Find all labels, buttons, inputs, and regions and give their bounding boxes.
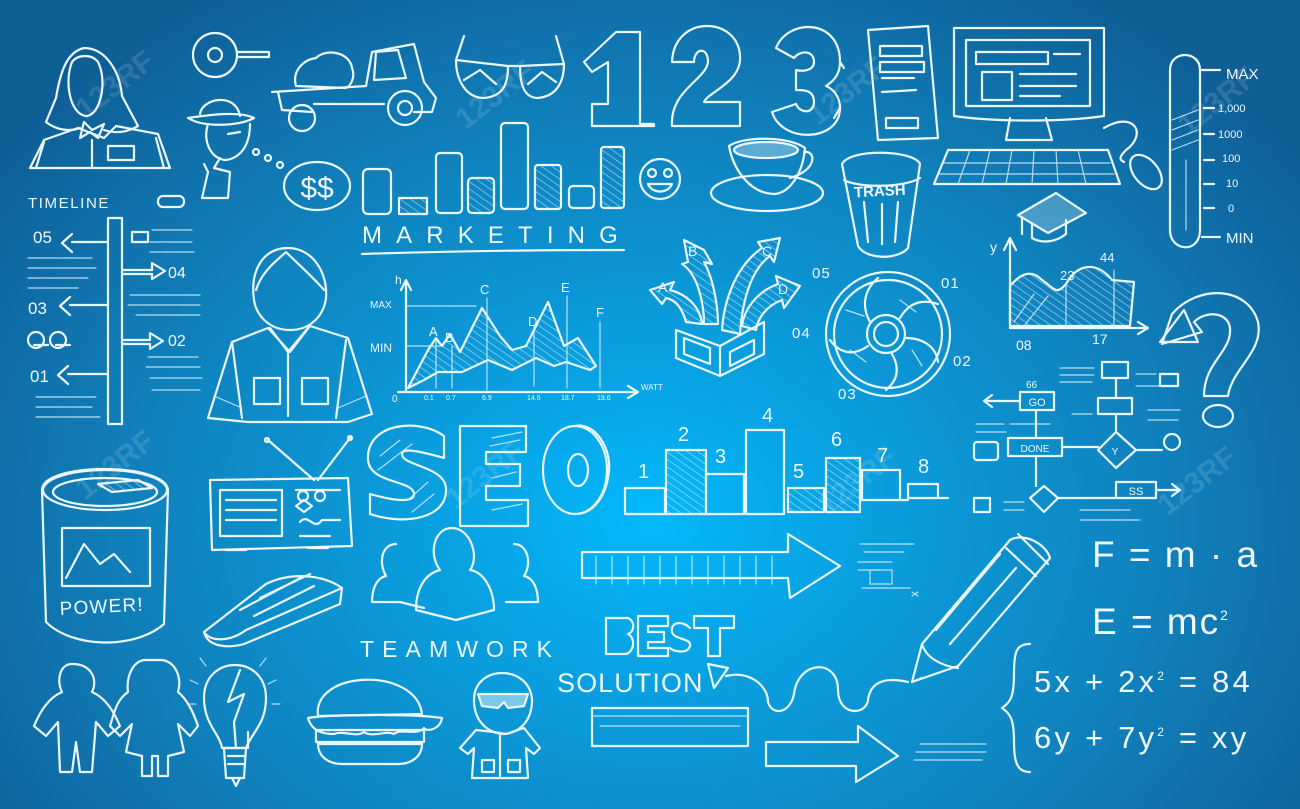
icon: thermometer scale: 10: [1226, 178, 1238, 190]
icon: woman portrait: [30, 48, 170, 168]
line chart: max min: h: [395, 273, 402, 287]
text block: sketch note: [858, 544, 918, 596]
line chart: max min: 14.6: [527, 395, 541, 402]
panel: flowchart: GO: [1028, 397, 1046, 409]
icon: flat bar: [592, 708, 748, 746]
line chart: max min: F: [596, 305, 604, 320]
icon: box with arrows: B: [688, 243, 697, 259]
icon: team of people: [372, 528, 538, 620]
bar chart: numbered podium: 4: [762, 405, 773, 427]
icon: trash bin: [842, 153, 920, 257]
watermarks: 123RF: [70, 424, 161, 506]
bar chart: numbered podium: [625, 405, 948, 514]
heading: timeline: TIMELINE: [28, 195, 110, 212]
text block: note lines: [914, 744, 986, 760]
icon: graduation cap: [1018, 193, 1086, 241]
icon: camera-shutter pie: 02: [953, 353, 972, 370]
text: physics formulas: E = mc: [1092, 601, 1220, 642]
icon: box with arrows: [650, 238, 800, 376]
text: equations with brace: = 84: [1167, 664, 1253, 699]
icon: box with arrows: D: [778, 281, 788, 297]
icon: frying pan: [193, 33, 269, 77]
panel: flowchart: [974, 362, 1180, 520]
text: equations with brace: = xy: [1167, 720, 1249, 755]
icon: glasses: [456, 36, 564, 98]
line chart: max min: 18.7: [561, 395, 575, 402]
bar chart: numbered podium: 2: [678, 424, 689, 446]
area chart: y axis: [990, 238, 1148, 353]
bar chart: top sketch bars: [363, 123, 624, 214]
icon: thermometer scale: 0: [1228, 203, 1234, 215]
icon: smiley: [640, 159, 680, 199]
icon: camera-shutter pie: 04: [792, 325, 811, 342]
icon: trash bin: TRASH: [854, 182, 906, 201]
line chart: max min: 0: [392, 394, 398, 405]
icon: camera-shutter pie: 01: [941, 275, 960, 292]
panel: timeline diagram: 05: [33, 228, 52, 247]
icon: thermometer scale: 100: [1222, 153, 1240, 165]
watermarks: 123RF: [70, 44, 161, 126]
line chart: max min: C: [480, 282, 489, 297]
icon: big right arrow: [582, 534, 840, 598]
icon: thermometer scale: 1000: [1218, 129, 1242, 141]
icon: man and woman: [34, 660, 198, 776]
heading: timeline: [28, 195, 184, 212]
text: physics formulas: 2: [1220, 607, 1230, 623]
bar chart: numbered podium: 6: [831, 429, 842, 451]
icon: monitor and keyboard: [934, 28, 1168, 195]
icon: light bulb: [188, 658, 280, 786]
panel: timeline diagram: 01: [30, 367, 49, 386]
watermarks: 123RF: [1152, 441, 1243, 522]
icon: question mark: [1160, 293, 1259, 427]
line chart: max min: [370, 273, 663, 405]
panel: timeline diagram: [28, 218, 202, 424]
watermarks: 123RF: [1172, 61, 1263, 142]
panel: flowchart: SS: [1129, 486, 1143, 498]
bar chart: numbered podium: 3: [715, 446, 726, 468]
icon: businessman bust: [208, 248, 372, 422]
icon: box with arrows: A: [658, 279, 668, 295]
bar chart: numbered podium: 7: [877, 445, 888, 467]
icon: camera-shutter pie: 05: [812, 265, 831, 282]
line chart: max min: MIN: [370, 341, 392, 355]
line chart: max min: B: [445, 330, 454, 345]
line chart: max min: 0.1: [424, 395, 434, 402]
area chart: y axis: y: [990, 239, 997, 255]
icon: camera-shutter pie: 03: [838, 386, 857, 403]
icon: radio tv: [210, 436, 352, 550]
line chart: max min: A: [429, 324, 438, 339]
text: equations with brace: 2: [1157, 725, 1167, 739]
bar chart: numbered podium: 8: [918, 456, 929, 478]
area chart: y axis: 23: [1060, 268, 1074, 283]
text: equations with brace: 2: [1157, 669, 1167, 683]
icon: thermometer scale: MIN: [1226, 230, 1254, 247]
watermarks: [70, 44, 1263, 522]
bar chart: numbered podium: 5: [793, 461, 804, 483]
panel: timeline diagram: 02: [168, 333, 186, 350]
text: equations with brace: 5x + 2x: [1034, 664, 1157, 699]
line chart: max min: E: [561, 280, 570, 295]
panel: flowchart: DONE: [1021, 444, 1050, 455]
icon: bottom arrow: [766, 726, 898, 782]
area chart: y axis: 17: [1092, 331, 1108, 347]
line chart: max min: D: [528, 314, 537, 329]
text: equations with brace: [1002, 644, 1253, 772]
panel: flowchart: 66: [1026, 380, 1038, 391]
icon: eraser: [204, 574, 342, 646]
watermarks: 123RF: [440, 434, 531, 516]
text: physics formulas: [1092, 534, 1259, 642]
line chart: max min: MAX: [370, 300, 392, 311]
icon: computer tower: [868, 26, 938, 140]
icon: man with hat: [188, 100, 254, 198]
icon: dollars bubble: [284, 162, 350, 210]
panel: timeline diagram: 04: [168, 265, 186, 282]
bar chart: numbered podium: 1: [638, 461, 649, 483]
panel: timeline diagram: 03: [28, 299, 47, 318]
icon: thermometer scale: [1170, 55, 1259, 247]
icon: dollars bubble: $$: [300, 172, 334, 205]
icon: man with sunglasses: [460, 673, 540, 778]
icon: pencil: [912, 534, 1050, 682]
text: solution: SOLUTION: [557, 668, 703, 698]
heading: best: [606, 616, 734, 656]
area chart: y axis: 44: [1100, 250, 1114, 265]
icon: thought dots: [253, 149, 283, 168]
heading: marketing: MARKETING: [362, 222, 620, 249]
area chart: y axis: 08: [1016, 337, 1032, 353]
line chart: max min: WATT: [641, 383, 663, 392]
icon: pickup truck: [272, 44, 436, 131]
icon: burger: [308, 680, 442, 764]
text: teamwork: TEAMWORK: [360, 636, 554, 662]
icon: can power: [42, 469, 168, 643]
icon: box with arrows: C: [762, 243, 772, 259]
line chart: max min: 19.6: [597, 395, 611, 402]
icon: thermometer scale: 1,000: [1218, 103, 1246, 115]
heading: numbers 1 2 3: [584, 26, 844, 135]
watermarks: 123RF: [450, 54, 541, 136]
watermarks: 123RF: [812, 441, 903, 522]
heading: SEO: [368, 426, 609, 526]
icon: squiggle line: [726, 667, 908, 711]
panel: flowchart: Y: [1112, 447, 1119, 458]
icon: camera-shutter pie: [792, 265, 972, 403]
icon: thermometer scale: MAX: [1226, 66, 1259, 83]
text: physics formulas: F = m · a: [1092, 534, 1259, 575]
icon: can power: POWER!: [59, 595, 144, 620]
line chart: max min: 0.7: [446, 395, 456, 402]
watermarks: 123RF: [802, 51, 893, 132]
line chart: max min: 6.9: [482, 395, 492, 402]
icon: coffee cup: [711, 139, 823, 211]
text: equations with brace: 6y + 7y: [1034, 720, 1157, 755]
